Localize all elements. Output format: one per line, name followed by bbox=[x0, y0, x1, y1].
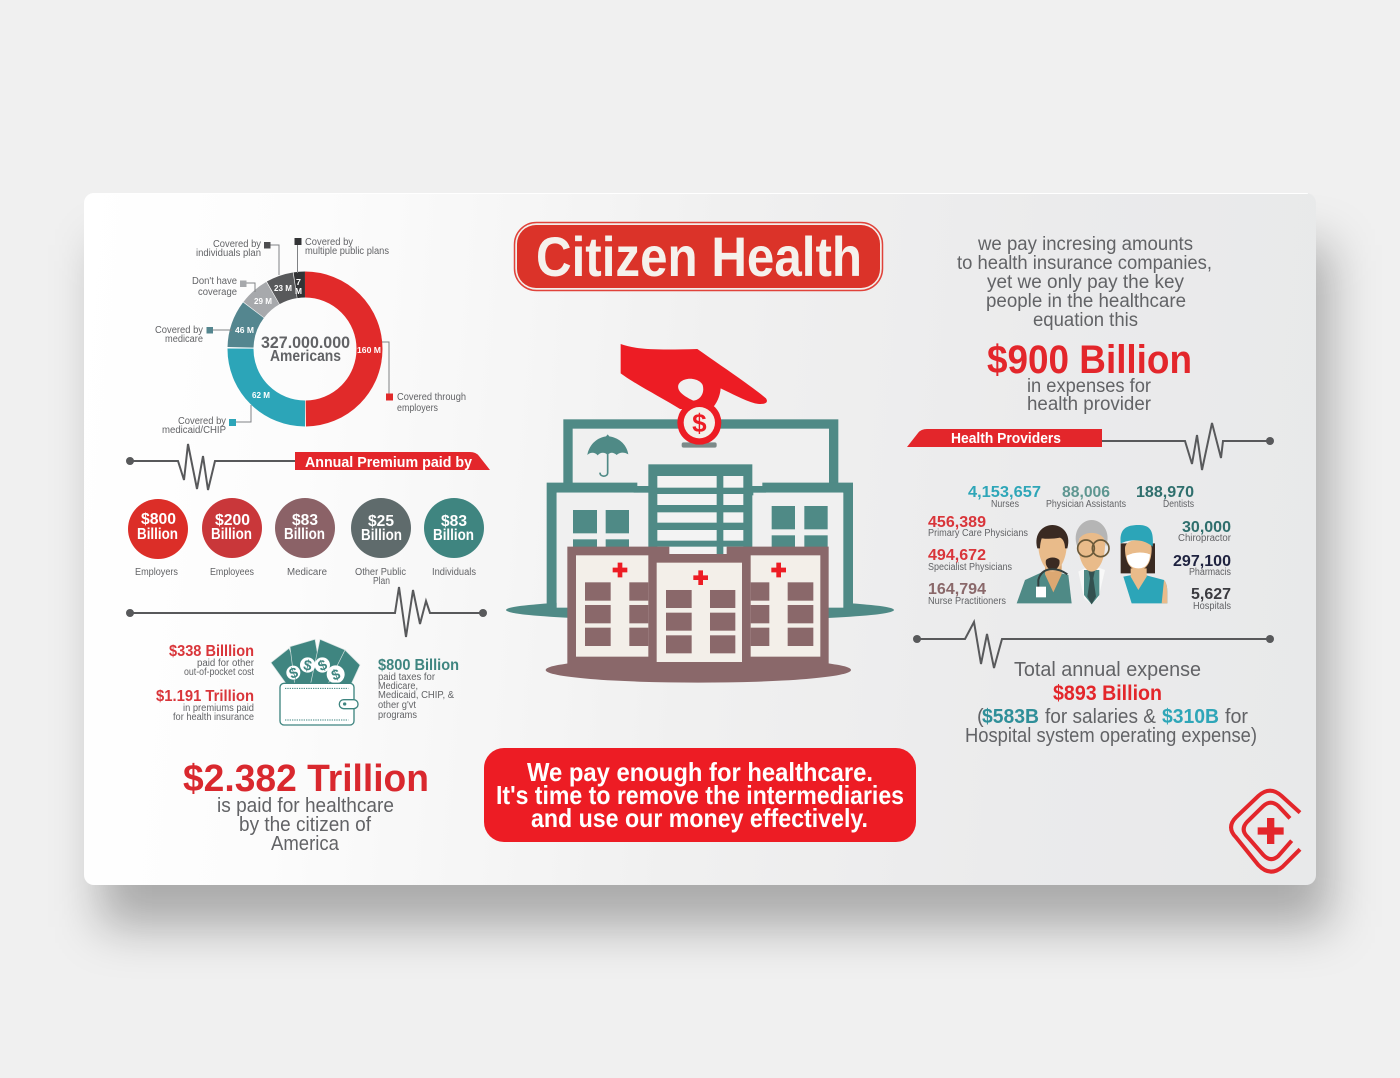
text: taxes: Medicaid, CHIP, & bbox=[378, 690, 454, 701]
payer: individuals bbox=[424, 498, 484, 578]
donut legend labels bbox=[155, 237, 466, 436]
text: taxes bbox=[378, 657, 459, 721]
payer: medicare bbox=[275, 498, 335, 578]
payer: other public plan bbox=[351, 498, 411, 587]
text: insurance intro: people in the healthcare bbox=[986, 291, 1186, 312]
donut centre total: Americans bbox=[270, 348, 341, 365]
card drop shadow bbox=[100, 245, 1330, 927]
panel: provider counts top: 88,006 bbox=[1062, 484, 1110, 501]
callout button bbox=[484, 748, 916, 842]
callout: provider expense bbox=[987, 338, 1192, 415]
title: Citizen Health bbox=[536, 225, 862, 288]
callout button: It's time to remove the intermediaries bbox=[496, 780, 904, 810]
donut legend labels: Covered through bbox=[397, 392, 466, 403]
text: out of pocket and premiums: for health insurance bbox=[173, 712, 254, 723]
callout: total paid: is paid for healthcare bbox=[217, 795, 394, 817]
callout: total paid: $2.382 Trillion bbox=[183, 758, 429, 800]
payer: employers bbox=[128, 499, 188, 578]
text: out of pocket and premiums: $1.191 Trillion bbox=[156, 688, 254, 705]
text: insurance intro: yet we only pay the key bbox=[987, 272, 1184, 293]
text: total annual expense: $310B bbox=[1162, 706, 1219, 728]
text: total annual expense bbox=[965, 659, 1257, 747]
donut legend labels: multiple public plans bbox=[305, 246, 389, 257]
heading banner: annual premium: Annual Premium paid by bbox=[305, 454, 473, 471]
donut centre total: 327.000.000 bbox=[261, 333, 350, 352]
donut segment values: 29 M bbox=[254, 297, 272, 306]
panel: provider counts top: 188,970 bbox=[1136, 484, 1194, 501]
donut centre total bbox=[261, 333, 350, 365]
teal ground bbox=[506, 599, 894, 621]
icon: hand bbox=[621, 344, 767, 409]
icon: dollar coin: $ bbox=[692, 408, 707, 438]
icon: umbrella bbox=[587, 434, 628, 476]
heading banner: health providers bbox=[907, 429, 1102, 447]
payer: individuals: Billion bbox=[433, 527, 474, 544]
panel: provider counts left: Nurse Practitioners bbox=[928, 596, 1006, 607]
donut legend labels: Don't have bbox=[192, 276, 237, 287]
panel: provider counts top: Dentists bbox=[1163, 499, 1194, 510]
masked nurse bbox=[1120, 525, 1167, 603]
text: taxes: $800 Billion bbox=[378, 657, 459, 674]
text: total annual expense: Total annual expense bbox=[1014, 659, 1201, 681]
donut segment values: 62 M bbox=[252, 391, 270, 400]
heartbeat line: annual premium bbox=[126, 444, 295, 490]
text: out of pocket and premiums: $338 Billlion bbox=[169, 643, 254, 660]
text: total annual expense: for bbox=[1225, 706, 1248, 728]
panel: provider counts top bbox=[968, 484, 1194, 510]
slot bbox=[682, 442, 717, 448]
payer: employees: $200 bbox=[215, 512, 250, 529]
payer: other public plan: Billion bbox=[361, 527, 402, 544]
payer: employers: Employers bbox=[135, 567, 178, 578]
callout: provider expense: in expenses for bbox=[1027, 376, 1152, 397]
text: out of pocket and premiums: out-of-pocket cost bbox=[184, 667, 254, 678]
text: out of pocket and premiums: paid for other bbox=[197, 658, 255, 669]
donut segment values: 160 M bbox=[357, 346, 381, 355]
icon: wallet with cash: $ bbox=[330, 667, 343, 684]
panel: provider counts left: 456,389 bbox=[928, 514, 986, 531]
icon: wallet with cash bbox=[271, 639, 360, 725]
panel: premium payers circles bbox=[128, 498, 484, 587]
heading banner: health providers: Health Providers bbox=[951, 430, 1061, 447]
callout: total paid: America bbox=[271, 833, 340, 855]
panel: provider counts right: 30,000 bbox=[1182, 519, 1231, 536]
payer: employees: Billion bbox=[211, 526, 252, 543]
donut legend labels: coverage bbox=[198, 287, 237, 298]
illustration: hospital bbox=[506, 424, 894, 683]
callout: total paid bbox=[183, 758, 429, 855]
text: total annual expense: $583B bbox=[982, 706, 1039, 728]
payer: employers: $800 bbox=[141, 511, 176, 528]
text: taxes: paid taxes for bbox=[378, 672, 436, 683]
panel: provider counts right: Chiropractor bbox=[1178, 533, 1232, 544]
left wing bbox=[552, 488, 650, 608]
payer: other public plan: Other Public bbox=[355, 567, 406, 578]
donut segment values bbox=[235, 278, 381, 400]
panel: provider counts right bbox=[1173, 519, 1232, 612]
right wing bbox=[753, 488, 848, 608]
callout: provider expense: health provider bbox=[1027, 394, 1152, 415]
donut chart bbox=[215, 259, 395, 439]
text: taxes: other g'vt bbox=[378, 700, 416, 711]
callout: provider expense: $900 Billion bbox=[987, 338, 1192, 382]
donut segment values: M bbox=[295, 287, 302, 296]
text: total annual expense: for salaries & bbox=[1045, 706, 1157, 728]
text: insurance intro: we pay incresing amounts bbox=[977, 234, 1193, 255]
donut segment values: 23 M bbox=[274, 284, 292, 293]
brown ground bbox=[546, 657, 851, 683]
text: total annual expense: ( bbox=[977, 706, 984, 728]
panel: provider counts right: Hospitals bbox=[1193, 601, 1231, 612]
text: insurance intro: equation this bbox=[1033, 310, 1138, 331]
brown hospital block bbox=[567, 547, 829, 667]
heartbeat line: health providers bbox=[1102, 423, 1274, 470]
senior doctor bbox=[1076, 520, 1109, 604]
text: out of pocket and premiums bbox=[156, 643, 255, 723]
payer: individuals: Individuals bbox=[432, 567, 476, 578]
payer: individuals: $83 bbox=[441, 513, 467, 530]
panel: provider counts left bbox=[928, 514, 1028, 607]
donut segment values: 7 bbox=[296, 278, 302, 287]
payer: medicare: Medicare bbox=[287, 567, 327, 578]
icon: logo bbox=[1231, 791, 1300, 872]
panel: donut chart of coverage bbox=[155, 237, 466, 439]
callout button: and use our money effectively. bbox=[531, 803, 868, 833]
callout: total paid: by the citizen of bbox=[239, 814, 371, 836]
back building bbox=[568, 424, 834, 491]
donut legend labels: medicare bbox=[165, 334, 203, 345]
payer: medicare: Billion bbox=[284, 526, 325, 543]
illustration: hand dropping coin bbox=[621, 344, 767, 448]
payer: other public plan: Plan bbox=[373, 576, 390, 587]
icon: dollar coin bbox=[677, 401, 721, 445]
icon: three healthcare workers bbox=[1017, 520, 1167, 604]
text: insurance intro bbox=[957, 234, 1212, 331]
text: total annual expense: Hospital system operating expense) bbox=[965, 725, 1257, 747]
callout button: We pay enough for healthcare. bbox=[527, 757, 873, 787]
panel: provider counts left: 164,794 bbox=[928, 581, 986, 598]
donut legend labels: medicaid/CHIP bbox=[162, 425, 226, 436]
icon: wallet with cash: $ bbox=[316, 657, 330, 675]
payer: other public plan: $25 bbox=[368, 513, 394, 530]
payer: employers: Billion bbox=[137, 526, 178, 543]
donut legend labels: Covered by bbox=[213, 239, 261, 250]
text: out of pocket and premiums: in premiums paid bbox=[183, 703, 254, 714]
icon: wallet with cash: $ bbox=[287, 665, 300, 683]
donut legend labels: Covered by bbox=[178, 416, 226, 427]
text: total annual expense: $893 Billion bbox=[1053, 682, 1162, 705]
centre tower bbox=[648, 464, 752, 561]
card background bbox=[84, 193, 1316, 885]
payer: medicare: $83 bbox=[292, 512, 318, 529]
panel: provider counts top: 4,153,657 bbox=[968, 484, 1041, 501]
panel: provider counts right: Pharmacis bbox=[1189, 567, 1231, 578]
payer: employees: Employees bbox=[210, 567, 254, 578]
heartbeat line: divider bbox=[126, 587, 487, 637]
donut legend labels: employers bbox=[397, 403, 438, 414]
panel: provider counts left: Specialist Physicians bbox=[928, 562, 1012, 573]
donut legend labels: individuals plan bbox=[196, 248, 261, 259]
text: insurance intro: to health insurance companies, bbox=[957, 253, 1212, 274]
panel: provider counts left: 494,672 bbox=[928, 547, 986, 564]
panel: provider counts right: 297,100 bbox=[1173, 553, 1231, 570]
icon: wallet with cash: $ bbox=[302, 658, 313, 675]
heartbeat line: total expense bbox=[913, 622, 1274, 668]
male doctor bbox=[1017, 525, 1072, 603]
text: taxes: Medicare, bbox=[378, 681, 418, 692]
donut legend labels: Covered by bbox=[155, 325, 203, 336]
panel: provider counts right: 5,627 bbox=[1191, 586, 1231, 603]
payer: employees bbox=[202, 498, 262, 578]
text: taxes: programs bbox=[378, 710, 417, 721]
donut segment values: 46 M bbox=[235, 326, 254, 335]
panel: provider counts top: Physician Assistants bbox=[1046, 499, 1126, 510]
hand opening bbox=[678, 379, 703, 401]
donut legend labels: Covered by bbox=[305, 237, 353, 248]
panel: provider counts top: Nurses bbox=[991, 499, 1019, 510]
panel: provider counts left: Primary Care Physicians bbox=[928, 528, 1028, 539]
